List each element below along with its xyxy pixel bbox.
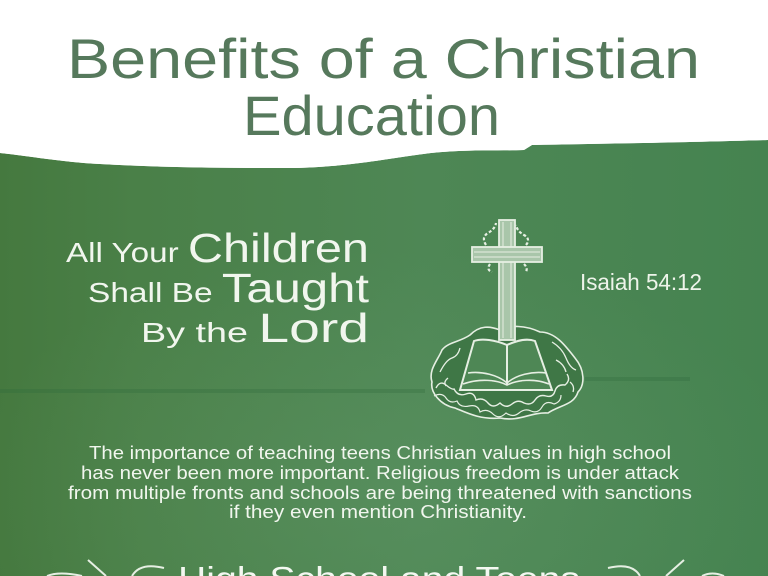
intro paragraph: if they even mention Christianity. [229,501,527,522]
crown around cross [484,223,528,272]
verse heading: By the Lord [141,305,369,351]
title: Benefits of a Christian [67,27,700,90]
intro paragraph: has never been more important. Religious freedom is under attack [81,462,680,483]
intro paragraph: The importance of teaching teens Christian values in high school [89,442,671,463]
wreath [431,326,583,419]
cross horizontal bar [472,247,542,262]
icon: right flourish [608,560,724,576]
open book [460,340,552,390]
icon: left flourish [47,560,164,576]
icon: cross on open bible with wreath [431,220,583,419]
cross vertical bar [499,220,515,340]
verse heading: Shall Be Taught [88,265,370,311]
intro paragraph [68,442,692,522]
title: Education [243,84,500,147]
reference: Isaiah 54:12: Isaiah 54:12 [580,269,702,295]
title [67,27,700,147]
intro paragraph: from multiple fronts and schools are being threatened with sanctions [68,482,692,503]
verse heading [66,225,370,351]
verse heading: All Your Children [66,225,369,271]
